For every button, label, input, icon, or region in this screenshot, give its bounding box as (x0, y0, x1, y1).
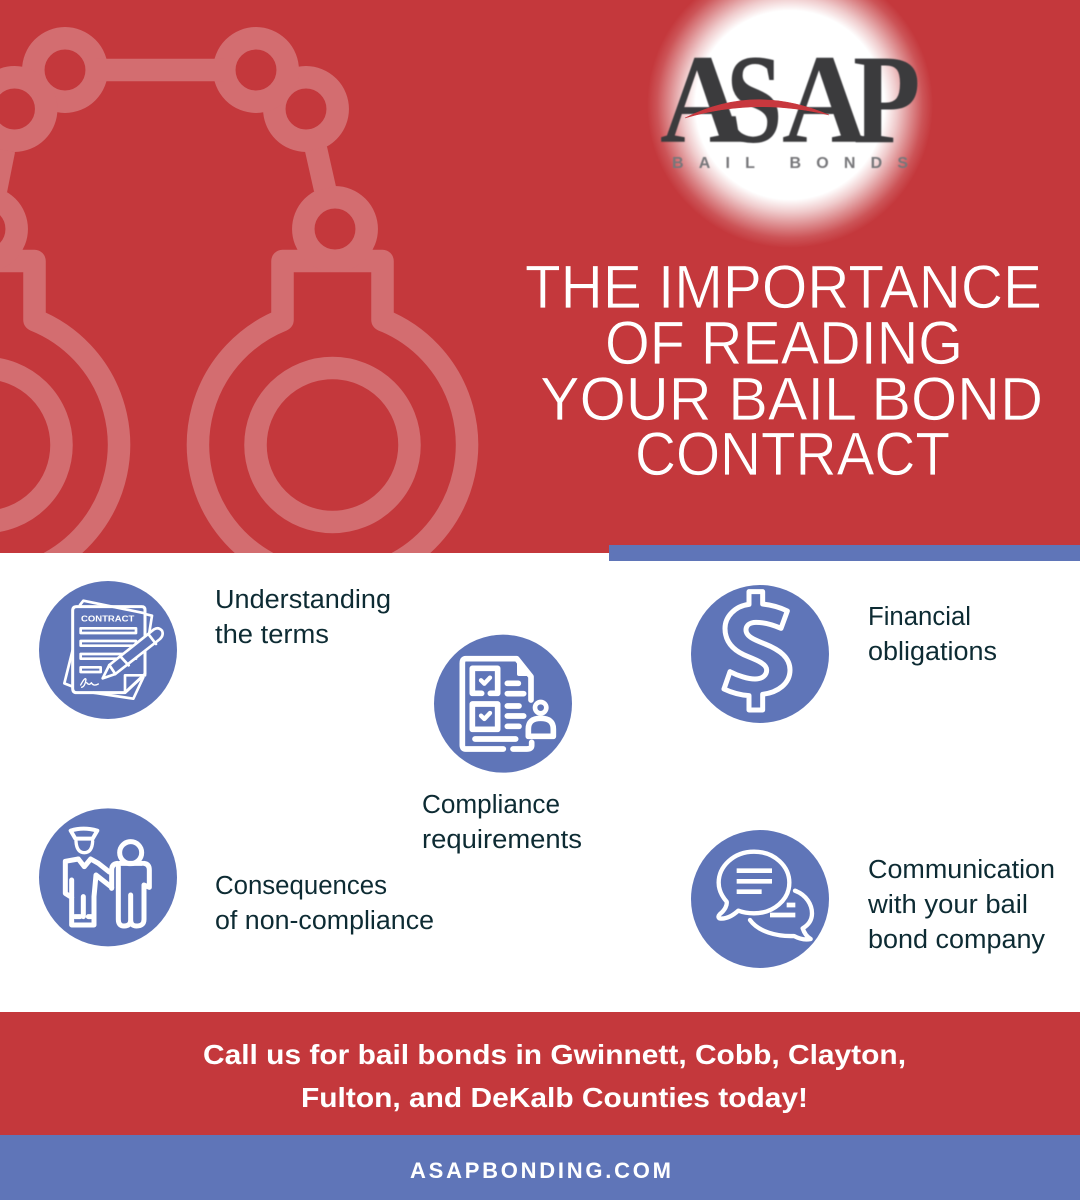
label (215, 872, 434, 935)
item: compliance requirements (422, 635, 582, 854)
item: communication (691, 830, 1055, 968)
label: bond company (868, 926, 1045, 954)
panel: call to action: Fulton, and DeKalb Counties today! (301, 1082, 808, 1113)
title: CONTRACT (635, 420, 950, 488)
label: Consequences (215, 872, 387, 900)
label: Communication (868, 856, 1055, 884)
label: of non-compliance (215, 907, 434, 935)
label: Compliance (422, 791, 560, 819)
item: financial obligations (691, 585, 997, 723)
panel: website footer (0, 1135, 1080, 1200)
logo: ASAP Bail Bonds: P (853, 29, 920, 170)
icon: speech bubbles (691, 830, 829, 968)
label (868, 603, 997, 666)
logo: ASAP Bail Bonds: A (782, 29, 867, 170)
label: Financial (868, 603, 971, 631)
logo: ASAP Bail Bonds (647, 0, 933, 248)
label: obligations (868, 638, 997, 666)
item: consequences of non-compliance (39, 808, 434, 946)
panel: red header (0, 0, 1080, 553)
label (867, 856, 1055, 954)
label (422, 791, 582, 854)
accent bar (609, 545, 1080, 561)
chain (0, 38, 367, 261)
icon: officer and person (39, 808, 177, 946)
logo: ASAP Bail Bonds: A (660, 29, 745, 170)
icon: contract: CONTRACT (81, 615, 134, 624)
title: OF READING (605, 309, 963, 377)
label: Understanding (215, 586, 391, 614)
icon: handcuffs (0, 38, 467, 579)
panel: website footer: ASAPBONDING.COM (410, 1158, 671, 1183)
logo: ASAP Bail Bonds: BAIL BONDS (672, 155, 908, 172)
title (525, 253, 1043, 488)
label (215, 586, 391, 649)
icon: checklist with person (434, 635, 572, 773)
panel: call to action: Call us for bail bonds in Gwinnett, Cobb, Clayton, (203, 1039, 906, 1070)
left cuff (0, 261, 119, 579)
label: the terms (215, 621, 329, 649)
label: requirements (422, 826, 582, 854)
item: understanding the terms (39, 581, 391, 719)
icon: dollar sign (691, 585, 829, 723)
title: YOUR BAIL BOND (540, 365, 1043, 433)
panel: call to action (0, 1012, 1080, 1135)
logo: ASAP Bail Bonds: S (726, 29, 783, 170)
icon: contract (39, 581, 177, 719)
label: with your bail (867, 891, 1028, 919)
right cuff (198, 261, 467, 579)
title: THE IMPORTANCE (525, 253, 1042, 321)
